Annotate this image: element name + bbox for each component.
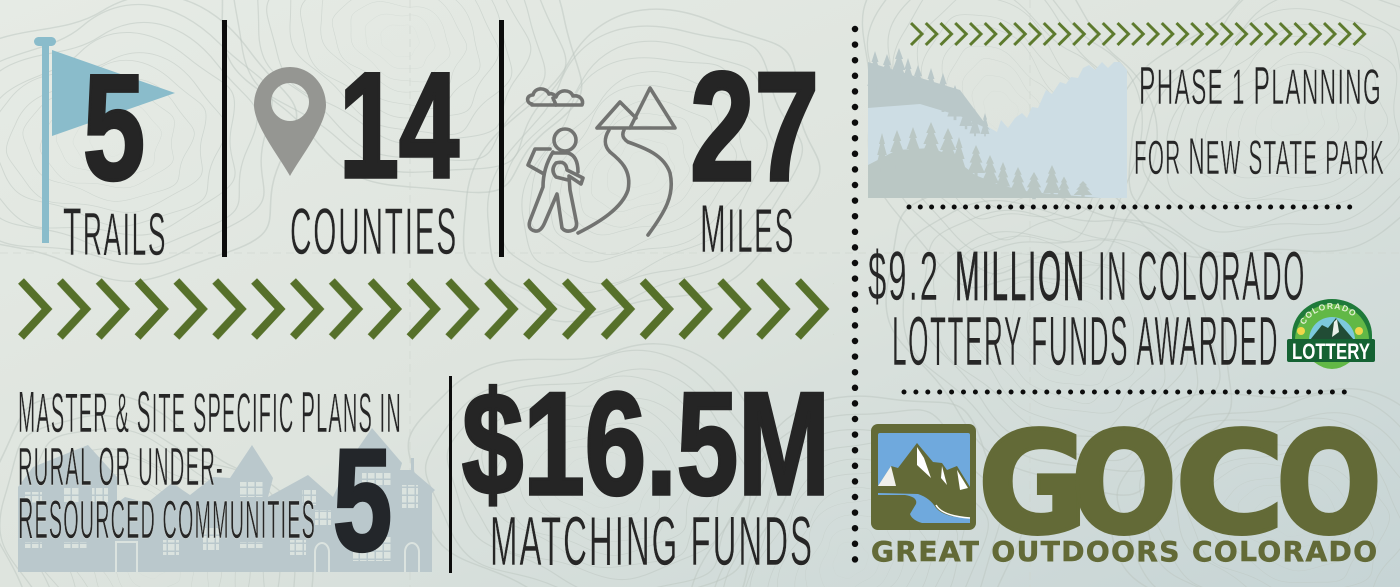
panel: matching funds [462,362,830,580]
icon: colorado lottery logo: COLORADO [1300,303,1356,324]
vertical dotted divider [852,29,858,572]
panel: master and site specific plans: RESOURCED COMMUNITIES [18,486,316,551]
number: 14 counties: 14 [339,41,459,209]
panel: master and site specific plans [18,380,435,581]
icon: map pin [254,67,326,176]
wordmark: GOCO: G [978,403,1088,566]
illustration: houses silhouette [18,428,435,572]
divider bar [499,20,504,257]
number: 5 trails: 5 [83,43,145,211]
illustration: forest [867,48,1127,199]
panel: miles stat [528,40,819,267]
wordmark: GOCO [978,403,1382,566]
horizontal dotted divider [904,390,1346,394]
wordmark: GOCO: O [1071,403,1177,566]
number: 27 miles: 27 [690,40,819,213]
wordmark: GOCO: C [1175,403,1285,566]
wordmark: great outdoors colorado: GREAT OUTDOORS COLORADO [871,535,1377,568]
icon: flag [34,37,175,243]
number: 5 communities: 5 [333,419,392,581]
label: miles: MILES [700,191,795,267]
horizontal dotted divider [909,204,1350,210]
wordmark: GOCO: O [1276,403,1382,566]
text: 9.2 million in colorado: MILLION [955,237,1086,315]
arrow row: small chevrons [910,20,1367,48]
icon: colorado lottery logo: LOTTERY [1292,339,1370,364]
panel: trails stat: TRAILS [63,194,167,270]
divider bar [222,20,227,257]
panel: GOCO logo [871,403,1382,568]
panel: counties stat [254,41,459,268]
icon: colorado lottery logo [1287,299,1375,369]
text: COUNTIES [290,194,458,268]
icon: hiker with trail and mountains [528,88,675,235]
icon: mountain and river badge [871,424,976,530]
panel: lottery funds [868,237,1375,380]
text: plans description: MASTER & SITE SPECIFIC PLANS IN [18,380,402,445]
panel: phase 1 planning [867,48,1385,199]
text: plans description [18,380,402,551]
number: 16.5M matching funds: $16.5M [462,362,830,525]
divider bar [449,376,452,573]
text: plans description: RURAL OR UNDER- [18,437,224,497]
panel: trails stat [34,37,175,270]
arrow row: large chevrons [18,276,834,342]
text: 9.2 million in colorado: $9.2 [868,237,940,315]
text: MATCHING FUNDS [490,502,814,580]
